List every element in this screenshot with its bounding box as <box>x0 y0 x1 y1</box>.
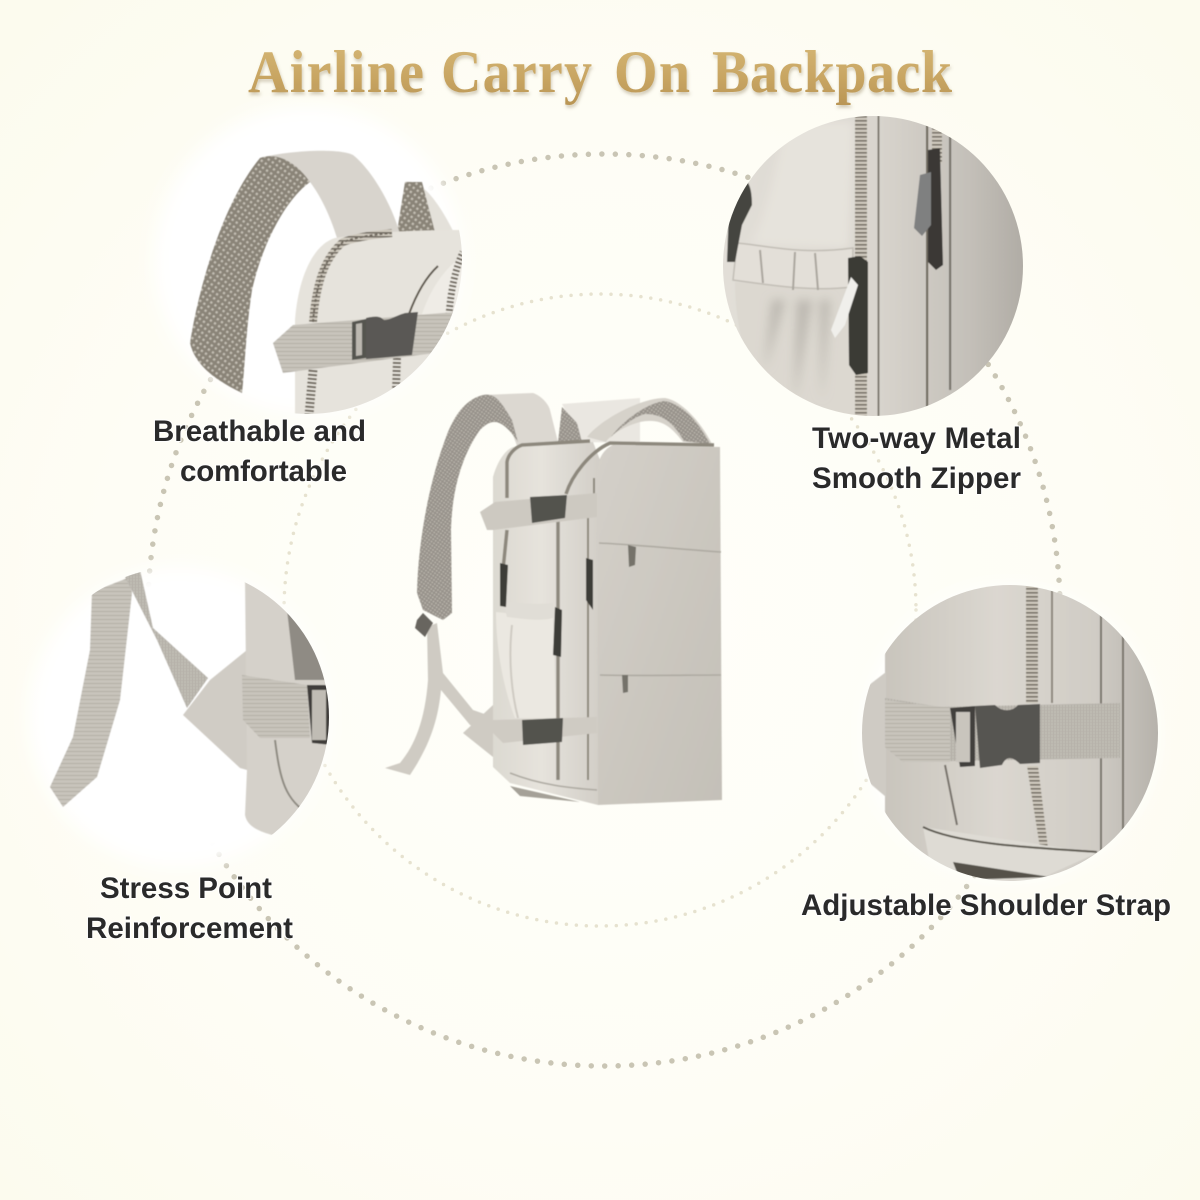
rear strap and handle backing <box>562 398 640 443</box>
lower buckle <box>522 718 563 745</box>
shoulder strap outer <box>483 393 558 446</box>
pockets <box>510 543 721 790</box>
label: breathable and comfortable: Breathable and <box>153 415 366 448</box>
upper compression band <box>480 493 597 530</box>
label: stress point reinforcement <box>86 872 293 945</box>
pocket pulls <box>622 545 636 693</box>
top handle <box>587 398 712 444</box>
lower straps <box>385 623 493 775</box>
bag front face <box>597 445 722 805</box>
zipper pulls <box>500 558 593 657</box>
rear strap mesh <box>558 407 582 442</box>
backpack <box>385 393 722 805</box>
panel: stress point reinforcement detail <box>29 567 340 867</box>
title: Airline <box>248 38 424 106</box>
panel: breathable shoulder strap detail <box>154 106 470 415</box>
label: stress point reinforcement: Stress Point <box>100 872 272 905</box>
shoulder strap mesh <box>417 395 518 620</box>
label: two-way metal smooth zipper: Smooth Zipper <box>812 462 1022 495</box>
title: Backpack <box>712 38 953 106</box>
side water pocket <box>496 602 556 718</box>
title: Carry <box>441 38 592 106</box>
inner dotted circle <box>284 294 916 926</box>
zippers <box>503 441 714 780</box>
bag underside <box>510 786 580 802</box>
strap adjuster <box>415 613 433 637</box>
label: breathable and comfortable: comfortable <box>180 455 347 488</box>
label: adjustable shoulder strap: Adjustable Shoulder Strap <box>801 889 1171 922</box>
label: two-way metal smooth zipper <box>812 422 1022 495</box>
bag side panel <box>493 442 600 805</box>
title: On <box>614 38 690 106</box>
panel: two-way zipper detail <box>720 112 1030 422</box>
label: stress point reinforcement: Reinforcement <box>86 912 293 945</box>
label: two-way metal smooth zipper: Two-way Metal <box>812 422 1021 455</box>
upper buckle <box>530 495 567 523</box>
label: breathable and comfortable <box>153 415 366 488</box>
panel: adjustable strap detail <box>860 583 1165 883</box>
title <box>248 38 953 106</box>
lower compression band <box>493 717 597 743</box>
outer dotted circle <box>148 154 1060 1066</box>
